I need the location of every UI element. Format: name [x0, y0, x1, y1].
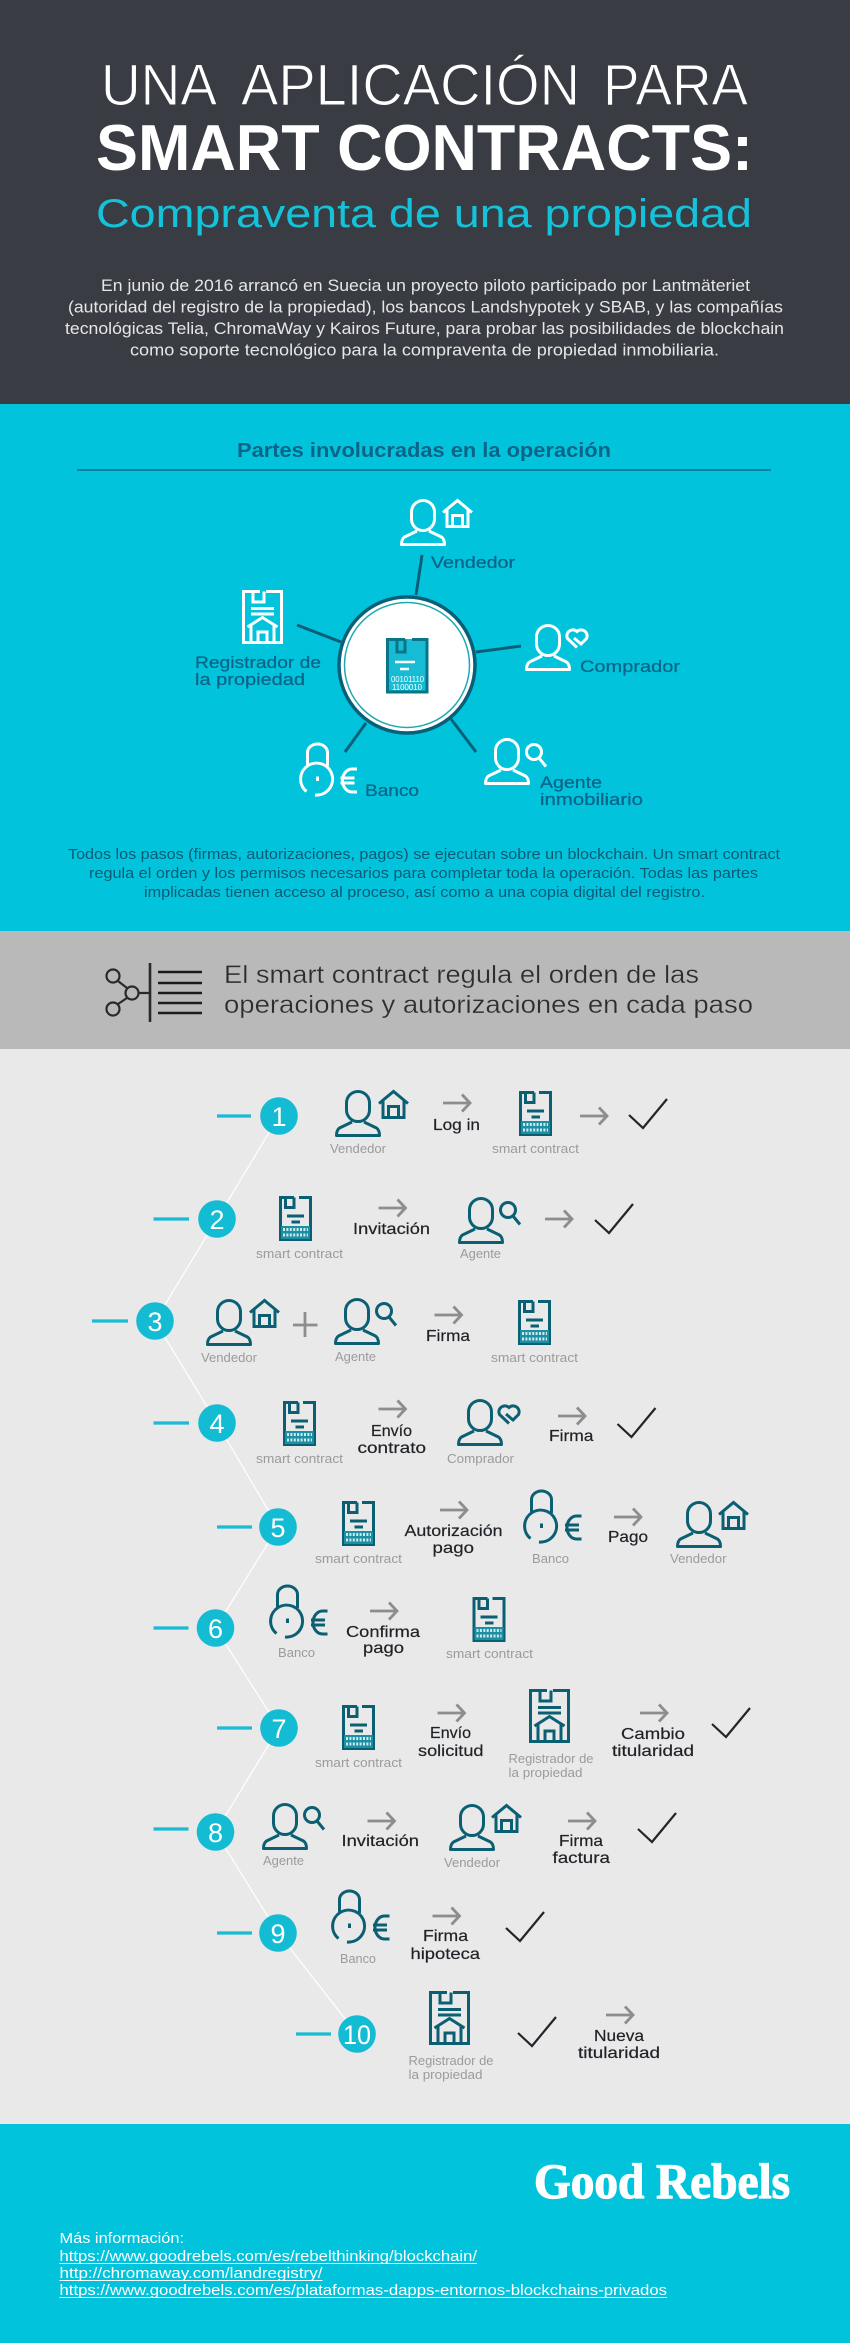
step 5: Banco [532, 1552, 569, 1566]
step 2: smart contract [256, 1247, 344, 1261]
intro paragraph: como soporte tecnológico para la compraventa de propiedad inmobiliaria. [130, 342, 719, 360]
step 6: Banco [278, 1646, 315, 1660]
step 4: Comprador [447, 1452, 514, 1466]
party: banco: Banco [365, 781, 419, 800]
central circle with smart contract icon: 00101110 [391, 675, 425, 684]
step 7: la propiedad [508, 1766, 583, 1780]
step 3: Firma [426, 1328, 470, 1345]
step 10: Registrador de [408, 2054, 494, 2068]
step 9 [217, 1891, 544, 1966]
step 9: hipoteca [410, 1946, 480, 1963]
step 8: factura [552, 1850, 610, 1867]
title line 1 [101, 53, 748, 118]
step 7: smart contract [315, 1756, 403, 1770]
panel: partes involucradas [0, 404, 850, 931]
step 5: Vendedor [670, 1552, 726, 1566]
step 5: Pago [608, 1529, 648, 1546]
party: vendedor [402, 500, 515, 572]
banner text: El smart contract regula el orden de las [224, 961, 699, 989]
step 3: Agente [335, 1350, 376, 1364]
description paragraph: Todos los pasos (firmas, autorizaciones, pagos) se ejecutan sobre un blockchain. Un smart contract [68, 846, 781, 863]
banner text [224, 961, 753, 1019]
step 9: 9 [270, 1919, 286, 1949]
step 5: pago [432, 1540, 474, 1557]
step 3: Vendedor [201, 1351, 257, 1365]
step 10: titularidad [578, 2045, 660, 2062]
step 2: Invitación [353, 1221, 430, 1238]
step 8: Agente [263, 1854, 304, 1868]
step 1 [217, 1092, 667, 1156]
step 1: 1 [271, 1102, 287, 1132]
step 6 [154, 1586, 534, 1661]
panel: banner smart contract [0, 931, 850, 1049]
step 2: Agente [460, 1247, 501, 1261]
more information links [60, 2230, 667, 2299]
title line 2: SMART CONTRACTS: [96, 111, 753, 184]
step 7 [217, 1690, 750, 1780]
panel: header [0, 0, 850, 404]
step 8: 8 [208, 1818, 223, 1848]
step 6: pago [363, 1640, 404, 1657]
icon: network and list [106, 963, 202, 1022]
step 3: smart contract [491, 1351, 579, 1365]
intro paragraph: En junio de 2016 arrancó en Suecia un proyecto piloto participado por Lantmäteriet [101, 277, 750, 295]
step 10 [296, 1992, 660, 2082]
panel: steps [0, 1049, 850, 2124]
step 9: Banco [340, 1952, 376, 1966]
party: agente: Agente [540, 773, 602, 792]
step 5 [217, 1491, 748, 1566]
step 4: Firma [549, 1428, 594, 1445]
title line 1: UNA [101, 53, 217, 118]
step 8: Firma [559, 1833, 603, 1850]
step 10: 10 [343, 2020, 371, 2050]
step 8: Invitación [342, 1833, 419, 1850]
heading: partes involucradas: Partes involucradas en la operación [237, 440, 611, 462]
intro paragraph: tecnológicas Telia, ChromaWay y Kairos Future, para probar las posibilidades de blockchain [65, 320, 784, 338]
step 4: Envío [371, 1423, 412, 1440]
description paragraph: implicadas tienen acceso al proceso, así como a una copia digital del registro. [144, 884, 705, 901]
step 6: 6 [208, 1614, 223, 1644]
title line 1: PARA [603, 53, 748, 118]
central circle with smart contract icon [339, 597, 475, 733]
step 9: Firma [423, 1928, 468, 1945]
step 10: Nueva [594, 2028, 644, 2045]
step 7: 7 [271, 1714, 287, 1744]
step 7: Registrador de [508, 1752, 594, 1766]
step 4 [154, 1400, 656, 1466]
step 8 [154, 1804, 676, 1870]
intro paragraph [65, 277, 784, 360]
step 8: Vendedor [444, 1856, 500, 1870]
step 4: smart contract [256, 1452, 344, 1466]
subtitle: Compraventa de una propiedad [96, 192, 752, 236]
more information links: https://www.goodrebels.com/es/rebelthinking/blockchain/ [60, 2248, 478, 2265]
intro paragraph: (autoridad del registro de la propiedad), los bancos Landshypotek y SBAB, y las compañías [68, 298, 783, 316]
step 4: 4 [209, 1409, 225, 1439]
step 7: Envío [430, 1725, 471, 1742]
more information links: Más información: [60, 2230, 184, 2247]
party: comprador [526, 626, 680, 676]
party: comprador: Comprador [580, 657, 680, 676]
party: registrador [195, 592, 321, 689]
party: vendedor: Vendedor [431, 553, 515, 572]
step 1: smart contract [492, 1142, 580, 1156]
step 6: Confirma [346, 1624, 420, 1641]
step 5: smart contract [315, 1552, 403, 1566]
party: agente: inmobiliario [540, 790, 643, 809]
more information links: https://www.goodrebels.com/es/plataformas-dapps-entornos-blockchains-privados [60, 2282, 667, 2299]
step 5: Autorización [404, 1523, 502, 1540]
step 4: contrato [358, 1440, 426, 1457]
step 7: Cambio [621, 1726, 685, 1743]
party: agente [486, 740, 643, 809]
logo: Good Rebels: Good Rebels [534, 2153, 790, 2209]
more information links: http://chromaway.com/landregistry/ [60, 2265, 323, 2282]
title line 1: APLICACIÓN [241, 53, 580, 118]
panel: footer [0, 2124, 850, 2343]
step 1: Vendedor [330, 1142, 386, 1156]
step 2: 2 [209, 1205, 225, 1235]
step 3 [92, 1300, 579, 1365]
description paragraph [68, 846, 781, 901]
banner text: operaciones y autorizaciones en cada paso [224, 991, 753, 1019]
party: registrador: Registrador de [195, 653, 321, 672]
party: registrador: la propiedad [195, 670, 305, 689]
step 5: 5 [270, 1513, 286, 1543]
step 1: Log in [433, 1117, 480, 1134]
step 7: titularidad [612, 1743, 694, 1760]
party: banco [301, 744, 419, 800]
step 3: 3 [147, 1307, 163, 1337]
step 6: smart contract [446, 1647, 534, 1661]
connectors [297, 555, 521, 752]
central circle with smart contract icon: 1100010 [392, 683, 423, 692]
description paragraph: regula el orden y los permisos necesarios para completar toda la operación. Todas las partes [89, 865, 758, 882]
step 7: solicitud [418, 1743, 484, 1760]
step 10: la propiedad [408, 2068, 483, 2082]
step 2 [154, 1198, 633, 1261]
